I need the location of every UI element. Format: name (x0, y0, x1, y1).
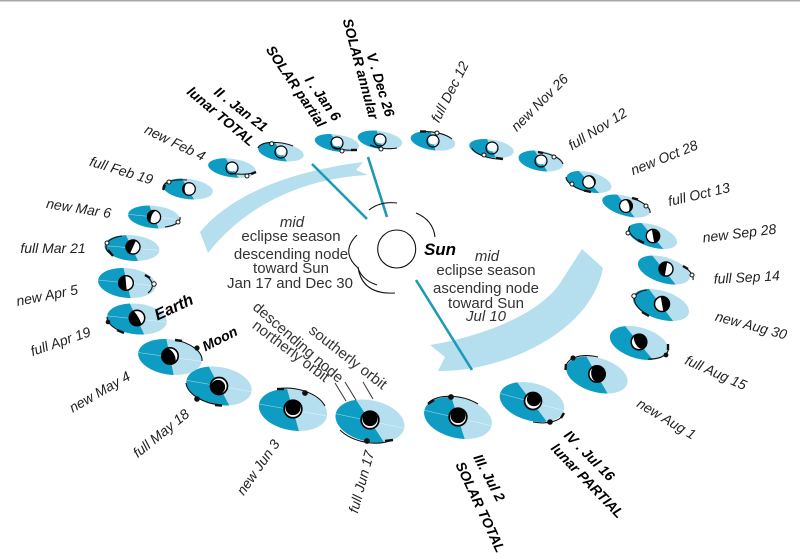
text block: descending node season (227, 214, 353, 292)
annotation leader lines (335, 382, 373, 401)
month: I Jan 6 solar partial: I . Jan 6 (302, 73, 345, 124)
month: full Feb 19: full Feb 19 (88, 153, 155, 187)
month: new Mar 6 (45, 195, 181, 233)
month: I Jan 6 solar partial (263, 42, 361, 157)
text block: descending node season: Jan 17 and Dec 30 (227, 275, 353, 292)
annotation: southerly orbit: southerly orbit (305, 322, 391, 394)
month: II Jan 21 lunar total: II . Jan 21 (211, 83, 271, 135)
icon: Sun (349, 203, 435, 293)
text block: ascending node season: toward Sun (448, 295, 524, 312)
month: V Dec 26 solar annular (340, 17, 404, 154)
month: full Mar 21: full Mar 21 (20, 240, 86, 256)
month: full Apr 19: full Apr 19 (28, 323, 93, 359)
month: V Dec 26 solar annular: V . Dec 26 (363, 51, 398, 119)
text block: ascending node season: ascending node (433, 280, 539, 297)
month: full Sep 14: full Sep 14 (713, 267, 780, 287)
month: III Jul 2 solar total: SOLAR TOTAL (453, 459, 509, 555)
month: II Jan 21 lunar total (184, 83, 305, 167)
month: new Jun 3: new Jun 3 (233, 436, 283, 498)
text block: descending node season: toward Sun (253, 260, 329, 277)
month: new May 4: new May 4 (66, 368, 133, 416)
month: II Jan 21 lunar total: lunar TOTAL (184, 83, 258, 149)
month: I Jan 6 solar partial: SOLAR partial (263, 42, 330, 131)
month: new Feb 4: new Feb 4 (142, 121, 208, 164)
annotation: descending node: descending node (249, 299, 347, 387)
label: Earth: Earth (152, 291, 196, 324)
month: new Apr 5 (15, 265, 157, 309)
month: full Jun 17 (317, 391, 409, 515)
pointer line: solar total eclipse to Sun (416, 280, 472, 370)
month: new Jun 3 (233, 382, 331, 498)
text block: ascending node season: Jul 10 (465, 308, 507, 325)
month: full May 18: full May 18 (130, 405, 192, 461)
month: V Dec 26 solar annular: SOLAR annular (340, 17, 382, 122)
month: new Aug 30 (617, 280, 789, 342)
text block: ascending node season: eclipse season (436, 262, 536, 279)
pointer line: solar annular eclipse to Sun (368, 157, 387, 217)
month: IV Jul 16 lunar partial: IV . Jul 16 (561, 427, 618, 484)
annotation: northerly orbit: northerly orbit (249, 317, 333, 386)
month: III Jul 2 solar total (410, 389, 509, 555)
pointer line: solar partial eclipse to Sun (312, 164, 367, 219)
month: full Oct 13: full Oct 13 (666, 179, 732, 209)
arrow: lower ribbon for ascending node season (430, 249, 603, 371)
text block: ascending node season (433, 248, 539, 325)
month: full Jun 17: full Jun 17 (345, 448, 377, 515)
month: full Feb 19 (88, 153, 214, 205)
month: new Oct 28 (555, 137, 700, 201)
month: new Aug 1 (549, 347, 699, 442)
month: new Oct 28: new Oct 28 (628, 137, 700, 178)
month: full Oct 13 (591, 179, 732, 225)
month: full Nov 12 (510, 104, 630, 178)
month: new Sep 28: new Sep 28 (702, 221, 777, 245)
month: full Dec 12: full Dec 12 (427, 58, 472, 125)
label: Moon: Moon (199, 323, 240, 354)
month: new Sep 28 (614, 215, 777, 258)
month: IV Jul 16 lunar partial: lunar PARTIAL (548, 440, 627, 521)
month: full Sep 14 (623, 247, 780, 295)
month: IV Jul 16 lunar partial (481, 372, 627, 521)
text block: descending node season: descending node (234, 246, 348, 263)
month: new Apr 5: new Apr 5 (15, 281, 79, 309)
month: new Nov 26 (463, 71, 571, 163)
month: new Aug 1: new Aug 1 (634, 395, 699, 442)
month: new Mar 6: new Mar 6 (45, 195, 113, 221)
month: new May 4 (66, 334, 204, 416)
arrow: upper ribbon for descending node season (200, 162, 368, 253)
month: full Nov 12: full Nov 12 (565, 104, 630, 153)
month: full Aug 15: full Aug 15 (683, 352, 749, 393)
month: full Apr 19 (28, 300, 168, 359)
month: new Feb 4 (142, 121, 257, 183)
month: new Aug 30: new Aug 30 (714, 308, 789, 342)
month: full Dec 12 (406, 58, 472, 155)
text block: descending node season: eclipse season (241, 228, 341, 245)
text block: ascending node season: mid (475, 248, 500, 265)
month: full Aug 15 (593, 317, 749, 393)
label: Sun: Sun (424, 240, 456, 259)
text block: descending node season: mid (280, 214, 305, 231)
month: new Nov 26: new Nov 26 (508, 71, 571, 134)
month: III Jul 2 solar total: III. Jul 2 (470, 451, 509, 504)
month: full May 18 (130, 360, 255, 461)
month: full Mar 21 (20, 232, 161, 266)
